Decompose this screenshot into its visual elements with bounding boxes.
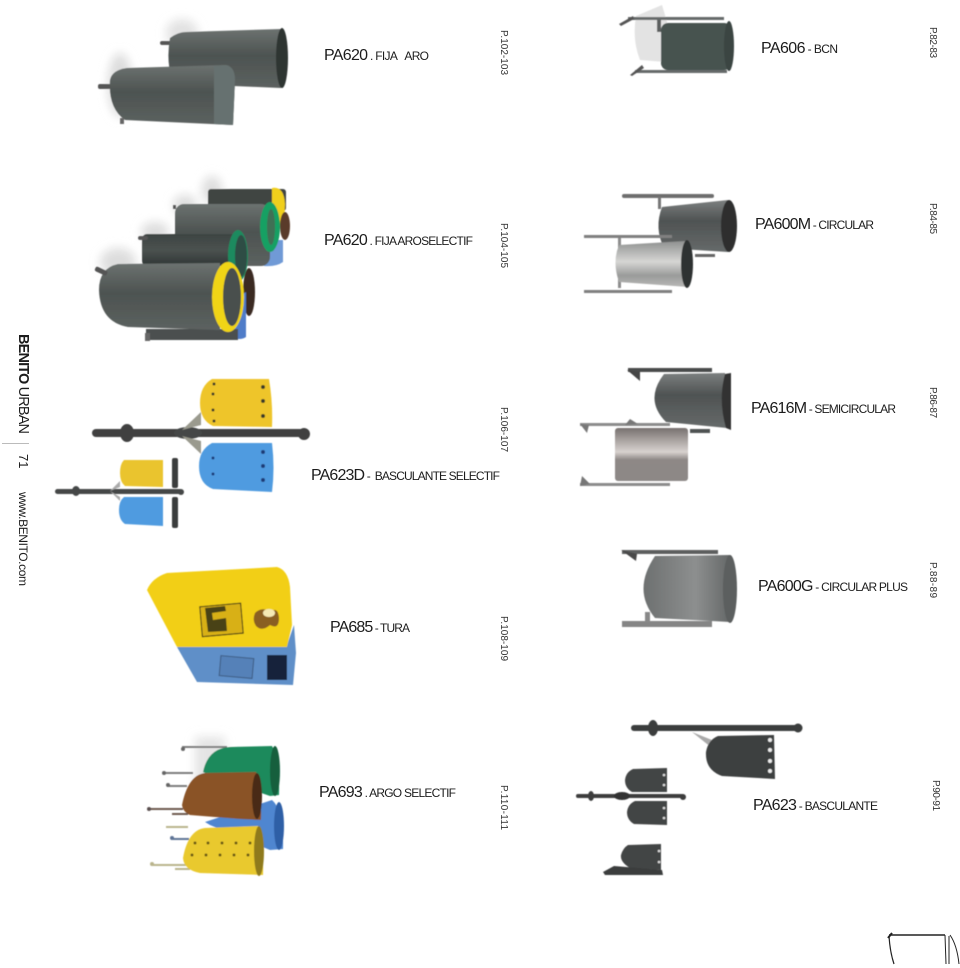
page reference: P.84-85 xyxy=(927,203,938,234)
page reference: P.102-103 xyxy=(498,30,509,75)
product: PA620 fija aro xyxy=(98,19,509,125)
product image xyxy=(580,368,731,486)
product image xyxy=(98,19,288,125)
product: PA620 fija aro selectif xyxy=(94,176,509,341)
website: www.BENITO.com xyxy=(16,491,30,586)
product: PA600G circular plus xyxy=(621,550,938,627)
page reference: P.88-89 xyxy=(927,562,938,598)
product code: PA623 - BASCULANTE xyxy=(753,797,878,814)
product image xyxy=(621,550,737,627)
brand name: BENITO URBAN xyxy=(15,334,31,434)
page reference: P.110-111 xyxy=(498,785,509,830)
product image xyxy=(55,379,310,528)
product code: PA623D - BASCULANTE SELECTIF xyxy=(311,467,500,484)
page reference: P.82-83 xyxy=(927,27,938,58)
product image xyxy=(584,194,737,293)
product image xyxy=(619,5,734,76)
product code: PA600M - CIRCULAR xyxy=(755,216,874,233)
product: PA606 BCN xyxy=(619,5,938,76)
product code: PA616M - SEMICIRCULAR xyxy=(751,400,896,417)
product image xyxy=(147,567,296,685)
product code: PA620 . FIJA ARO xyxy=(324,47,429,64)
page reference: P.108-109 xyxy=(498,616,509,661)
product: PA600M circular xyxy=(584,194,938,293)
product image xyxy=(94,176,290,341)
product code: PA600G - CIRCULAR PLUS xyxy=(758,578,908,595)
page reference: P.90-91 xyxy=(930,780,941,811)
product: PA685 tura xyxy=(147,567,509,685)
product code: PA606 - BCN xyxy=(761,40,838,57)
page number: 71 xyxy=(16,454,31,468)
product code: PA620 . FIJA AROSELECTIF xyxy=(324,232,473,249)
page reference: P.106-107 xyxy=(498,407,509,452)
product: PA623D basculante selectif xyxy=(55,379,509,528)
product: PA616M semicircular xyxy=(580,368,938,486)
product image xyxy=(576,720,802,875)
product image xyxy=(147,737,284,876)
product: PA623 basculante xyxy=(576,720,941,875)
icon: bench corner mark xyxy=(888,933,959,964)
product: PA693 argo selectif xyxy=(147,737,509,876)
sidebar: brand and page number xyxy=(2,334,31,586)
product code: PA693 . ARGO SELECTIF xyxy=(319,784,456,801)
page reference: P.104-105 xyxy=(498,223,509,268)
page reference: P.86-87 xyxy=(927,387,938,418)
product code: PA685 - TURA xyxy=(330,619,410,636)
